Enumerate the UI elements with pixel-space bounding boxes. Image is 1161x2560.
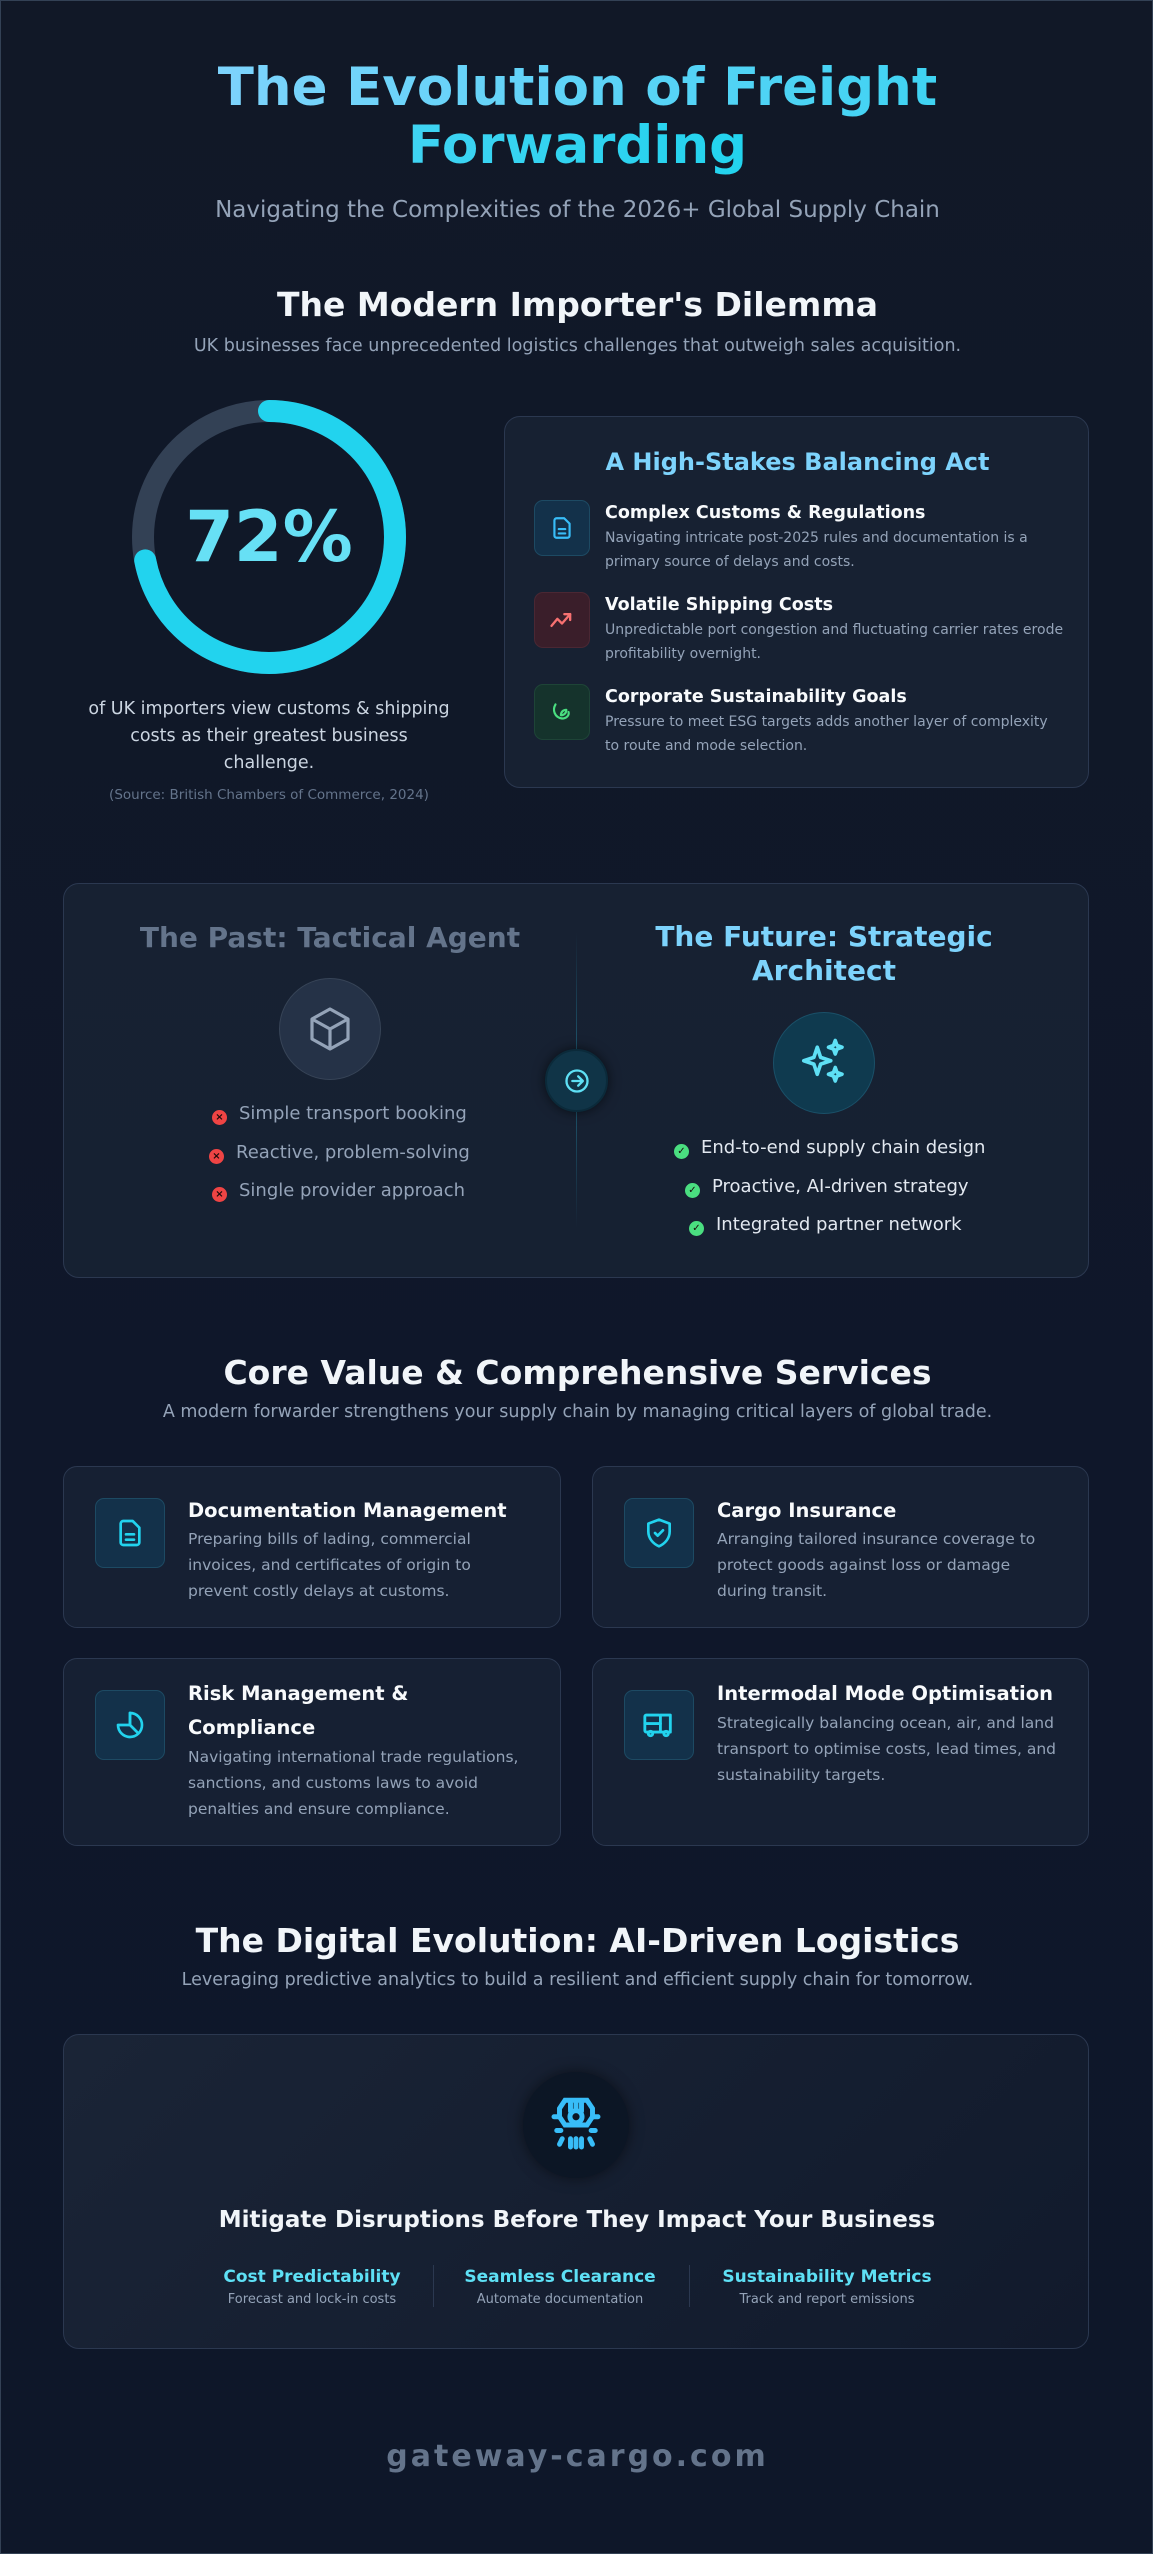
footer: gateway-cargo.com — [386, 2439, 769, 2474]
past heading: The Past: Tactical Agent — [140, 921, 520, 954]
item: shipping costs — [534, 592, 1063, 662]
stat: clearance — [464, 2267, 656, 2307]
future heading: The Future: Strategic Architect — [655, 920, 993, 987]
item: shipping costs: Unpredictable port congestion and fluctuating carrier rates erode profitability overnight. — [605, 622, 1063, 662]
subheading: services: A modern forwarder strengthens your supply chain by managing critical layers of global trade. — [163, 1402, 992, 1422]
item: customs: Complex Customs & Regulations — [605, 503, 925, 523]
past bullets: Simple transport booking — [239, 1103, 467, 1124]
item: sustainability: Pressure to meet ESG targets adds another layer of complexity to route and mode selection. — [605, 714, 1048, 754]
stat: clearance: Seamless Clearance — [464, 2267, 656, 2287]
heading: digital: The Digital Evolution: AI-Driven Logistics — [196, 1921, 959, 1960]
future bullets: ✓ — [692, 1223, 701, 1234]
future bullets: ✓ — [688, 1185, 697, 1196]
stat: sustainability: Sustainability Metrics — [722, 2267, 932, 2287]
panel: AI — [63, 2034, 1089, 2349]
stat: sustainability: Track and report emissions — [740, 2292, 914, 2307]
card: intermodal: Intermodal Mode Optimisation — [717, 1682, 1053, 1705]
stat: clearance: Automate documentation — [477, 2292, 643, 2307]
subtitle: Navigating the Complexities of the 2026+ Global Supply Chain — [215, 197, 940, 223]
panel heading: A High-Stakes Balancing Act — [606, 448, 990, 476]
heading: dilemma: The Modern Importer's Dilemma — [277, 285, 878, 324]
card: insurance — [592, 1466, 1089, 1628]
card: intermodal: Strategically balancing ocean, air, and land transport to optimise costs, lead times, and sustainability targets. — [717, 1714, 1056, 1784]
panel: balancing act — [504, 416, 1089, 788]
item: sustainability: Corporate Sustainability Goals — [605, 687, 907, 707]
arrow: past to future — [545, 1049, 608, 1112]
source: (Source: British Chambers of Commerce, 2024) — [109, 787, 429, 803]
card: documentation: Documentation Management — [188, 1499, 507, 1522]
item: customs — [534, 500, 1028, 570]
donut chart 72% — [132, 400, 406, 674]
stat: sustainability — [722, 2267, 932, 2307]
AI heading: Mitigate Disruptions Before They Impact Your Business — [219, 2207, 935, 2233]
icon: AI brain — [523, 2072, 629, 2178]
stat: cost: Forecast and lock-in costs — [228, 2292, 396, 2307]
past bullets — [209, 1103, 470, 1202]
card: documentation: Preparing bills of lading, commercial invoices, and certificates of origin to prevent costly delays at customs. — [188, 1530, 471, 1600]
past bullets: × — [215, 1189, 224, 1200]
title: Forwarding — [408, 115, 747, 176]
future bullets: Proactive, AI-driven strategy — [712, 1176, 969, 1197]
past bullets: × — [212, 1151, 221, 1162]
stat: cost: Cost Predictability — [223, 2267, 401, 2287]
subheading: digital: Leveraging predictive analytics to build a resilient and efficient supply chain for tomorrow. — [182, 1970, 973, 1990]
item: customs: Navigating intricate post-2025 rules and documentation is a primary source of delays and costs. — [605, 530, 1028, 570]
card: intermodal — [592, 1658, 1089, 1846]
past bullets: × — [215, 1112, 224, 1123]
title — [218, 57, 937, 176]
card: risk — [63, 1658, 561, 1846]
card: insurance: Cargo Insurance — [717, 1499, 896, 1522]
donut chart 72%: 72% — [185, 496, 353, 578]
item: sustainability — [534, 684, 1048, 754]
past bullets: Single provider approach — [239, 1180, 465, 1201]
donut caption: of UK importers view customs & shipping costs as their greatest business challenge. — [88, 699, 450, 773]
heading: services: Core Value & Comprehensive Services — [223, 1353, 932, 1392]
stat: cost — [223, 2267, 401, 2307]
icon: box — [279, 978, 381, 1080]
panel: past vs future — [63, 883, 1089, 1278]
future bullets: Integrated partner network — [716, 1214, 962, 1235]
future bullets — [674, 1137, 985, 1236]
past bullets: Reactive, problem-solving — [236, 1142, 470, 1163]
future bullets: ✓ — [677, 1146, 686, 1157]
subheading: dilemma: UK businesses face unprecedented logistics challenges that outweigh sales acquisition. — [194, 336, 961, 356]
divider line — [576, 932, 577, 1228]
card: risk: Risk Management & Compliance — [188, 1682, 408, 1739]
icon: sparkles — [773, 1012, 875, 1114]
card: insurance: Arranging tailored insurance coverage to protect goods against loss or damage during transit. — [717, 1530, 1035, 1600]
card: documentation — [63, 1466, 561, 1628]
title: The Evolution of Freight — [218, 57, 937, 118]
card: risk: Navigating international trade regulations, sanctions, and customs laws to avoid penalties and ensure compliance. — [188, 1748, 518, 1818]
item: shipping costs: Volatile Shipping Costs — [605, 595, 833, 615]
future bullets: End-to-end supply chain design — [701, 1137, 985, 1158]
